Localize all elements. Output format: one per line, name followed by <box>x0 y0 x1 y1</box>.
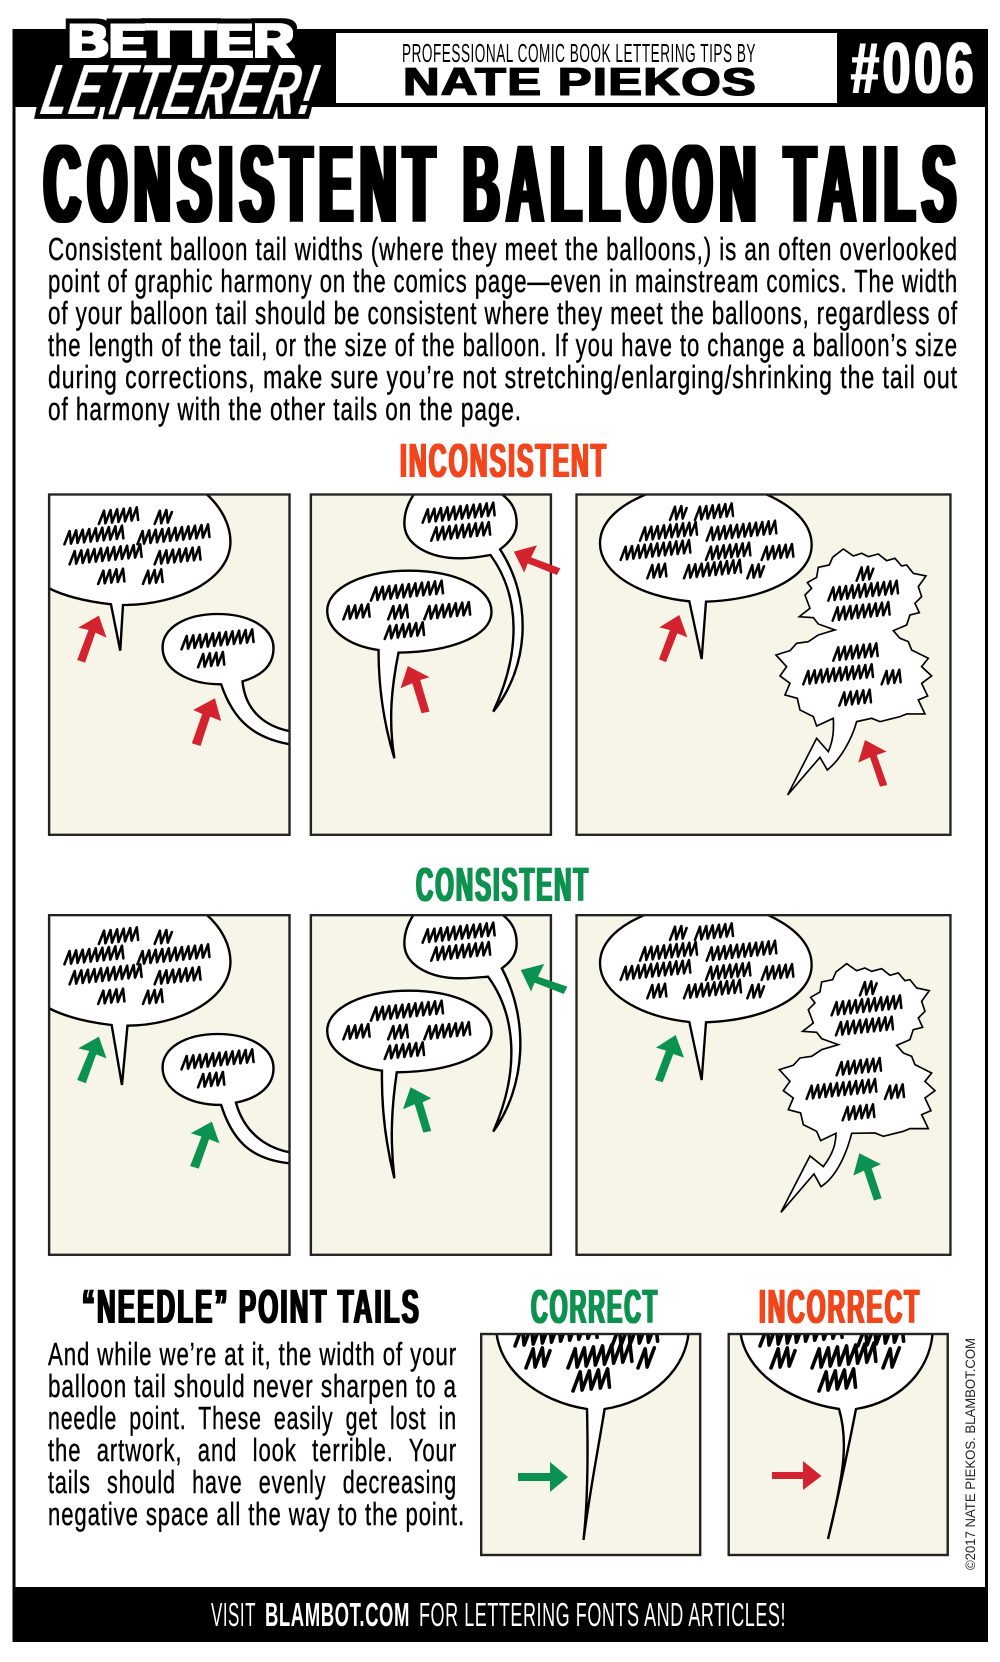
panel: consistent 3 <box>576 912 950 1255</box>
oval balloon <box>600 912 812 1080</box>
oval balloon <box>600 492 812 659</box>
arrow <box>514 545 560 575</box>
footer text: BLAMBOT.COM <box>265 1596 410 1633</box>
arrow <box>853 1153 882 1201</box>
infographic page: CONSISTENT <box>416 859 590 912</box>
panel: incorrect tail <box>729 1319 948 1555</box>
balloon with even tail <box>496 1325 689 1540</box>
panel: inconsistent 1 <box>44 490 297 835</box>
footer text: VISIT <box>211 1596 256 1633</box>
arrow <box>518 1462 568 1492</box>
needle paragraph: negative space all the way to the point. <box>48 1496 465 1532</box>
needle paragraph: the artwork, and look terrible. Your <box>48 1432 457 1468</box>
arrow <box>192 698 221 746</box>
arrow <box>403 1087 431 1133</box>
infographic page: CORRECT <box>531 1281 659 1334</box>
arrow <box>190 1122 219 1169</box>
needle paragraph: balloon tail should never sharpen to a <box>48 1368 457 1404</box>
arrow <box>858 740 887 787</box>
scribble lettering <box>513 1335 660 1393</box>
copyright line: ©2017 NATE PIEKOS. BLAMBOT.COM <box>962 1338 978 1570</box>
panel: correct tail <box>481 1319 700 1555</box>
intro paragraph: of harmony with the other tails on the page. <box>48 391 522 427</box>
arrow <box>77 616 106 663</box>
footer band <box>12 1587 988 1642</box>
burst balloon <box>776 549 932 795</box>
panel: inconsistent 3 <box>576 492 950 835</box>
burst balloon <box>779 964 935 1212</box>
heading: inconsistent: INCONSISTENT <box>400 435 608 488</box>
header band <box>12 29 988 109</box>
needle paragraph: needle point. These easily get lost in <box>48 1400 457 1436</box>
balloon with needle tail <box>740 1325 933 1539</box>
arrow <box>655 1035 684 1082</box>
upper balloon with long tail <box>404 492 523 712</box>
balloon with short tail <box>44 910 230 1085</box>
credit box <box>336 33 837 104</box>
panel: inconsistent 2 <box>311 492 560 835</box>
arrow <box>401 666 430 713</box>
balloon with short tail <box>44 490 230 651</box>
arrow <box>772 1461 822 1490</box>
arrow <box>659 615 687 662</box>
lower balloon with long tail <box>327 571 491 758</box>
needle paragraph: And while we’re at it, the width of your <box>48 1336 457 1372</box>
intro paragraph <box>48 231 958 427</box>
lower balloon with long tail <box>327 991 491 1178</box>
arrow <box>77 1037 106 1083</box>
logo word letterer: LETTERER! <box>37 52 327 128</box>
needle paragraph <box>48 1336 465 1532</box>
logo word better: BETTER <box>68 14 294 67</box>
scribble lettering <box>758 1335 906 1393</box>
panel: consistent 2 <box>311 912 567 1255</box>
author name: NATE PIEKOS <box>403 61 757 104</box>
balloon with wide curved tail <box>163 614 297 745</box>
panel: consistent 1 <box>44 910 297 1255</box>
arrow <box>521 964 567 994</box>
needle paragraph: tails should have evenly decreasing <box>48 1464 457 1500</box>
logo <box>37 14 327 128</box>
balloon with curved tail <box>163 1034 297 1164</box>
upper balloon with long tail <box>404 912 520 1132</box>
heading: needle point tails: “NEEDLE” POINT TAILS <box>82 1281 421 1334</box>
